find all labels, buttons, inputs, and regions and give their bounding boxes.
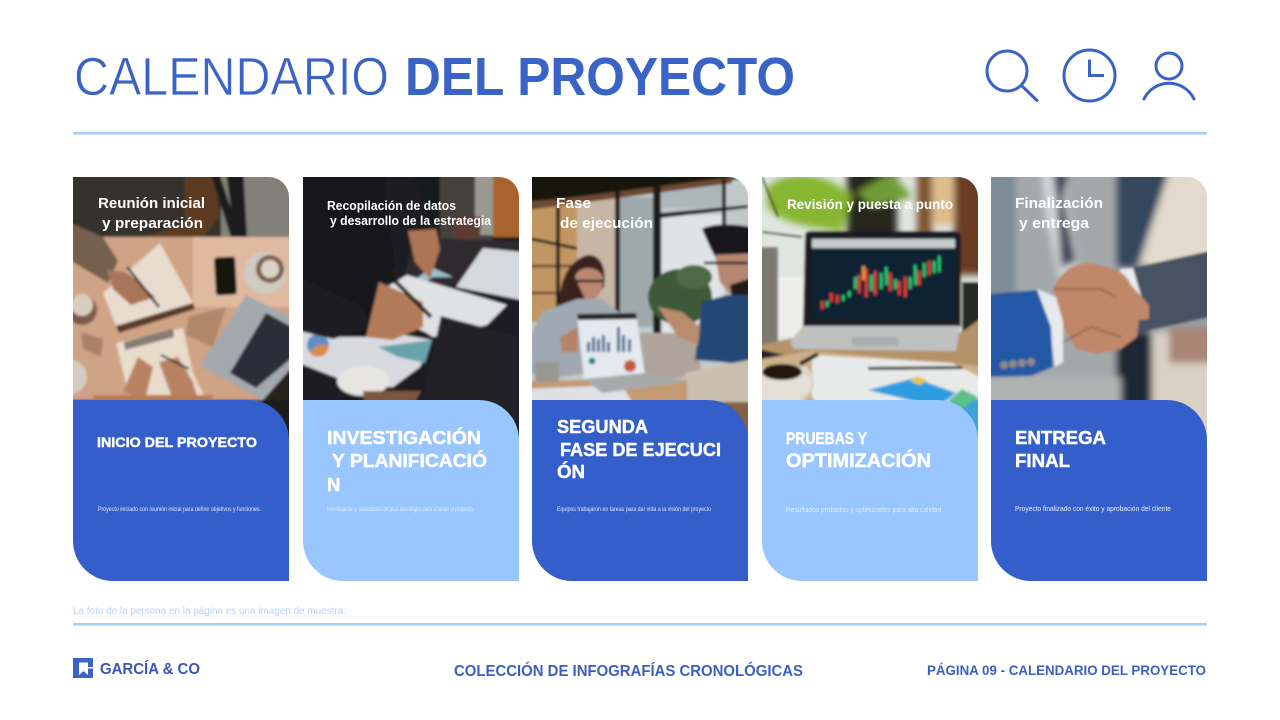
card heading	[786, 429, 931, 472]
logo: García & Co	[73, 658, 200, 678]
card heading: INVESTIGACIÓN	[327, 427, 481, 448]
icon: search	[987, 51, 1037, 100]
footer page label: PÁGINA 09 - CALENDARIO DEL PROYECTO	[927, 663, 1206, 678]
photo caption: de ejecución	[560, 216, 653, 232]
panel: blue description block	[73, 400, 289, 581]
panel: card 5 entrega final	[991, 177, 1207, 581]
panel: light blue description block	[762, 400, 978, 581]
card heading	[1015, 427, 1106, 471]
card heading: ÓN	[557, 461, 585, 482]
card heading	[327, 427, 487, 495]
card heading: PRUEBAS Y	[786, 429, 868, 448]
photo caption: Finalización	[1015, 196, 1103, 212]
photo caption: Reunión inicial	[98, 196, 205, 212]
photo caption: Recopilación de datos	[327, 199, 456, 213]
photo caption	[98, 196, 205, 232]
title: CALENDARIO	[74, 47, 389, 107]
icon: user	[1144, 53, 1194, 99]
panel: card 1 inicio del proyecto	[73, 177, 289, 581]
panel: light blue description block	[303, 400, 519, 581]
card description: Equipos trabajaron en tareas para dar vida a la visión del proyecto	[557, 507, 712, 513]
photo caption: y desarrollo de la estrategia	[330, 214, 492, 228]
card heading: SEGUNDA	[557, 416, 648, 437]
card description: Proyecto iniciado con reunión inicial para definir objetivos y funciones.	[98, 507, 261, 513]
card description: Resultados probados y optimizados para alta calidad	[786, 505, 941, 514]
photo caption	[1015, 196, 1103, 232]
panel: blue description block	[991, 400, 1207, 581]
card heading: FINAL	[1015, 450, 1070, 471]
panel: card 4 pruebas y optimización	[762, 177, 978, 581]
card description: Investigación y elaboración de plan estratégico para orientar el proyecto.	[327, 507, 474, 513]
card heading: ENTREGA	[1015, 427, 1106, 448]
title: DEL PROYECTO	[405, 47, 795, 107]
title	[74, 47, 795, 107]
sample image note: La foto de la persona en la página es una imagen de muestra.	[73, 606, 346, 617]
photo caption	[556, 196, 653, 232]
card heading: OPTIMIZACIÓN	[786, 450, 931, 472]
photo: desk from above	[73, 177, 289, 439]
photo: meeting at laptop	[532, 177, 748, 439]
panel: card 3 segunda fase de ejecución	[532, 177, 748, 581]
icon: logo mark	[73, 658, 93, 678]
panel: blue description block	[532, 400, 748, 581]
photo caption: y preparación	[102, 216, 203, 232]
panel: card 2 investigación y planificación	[303, 177, 519, 581]
card heading: N	[327, 474, 340, 495]
footer collection title: COLECCIÓN DE INFOGRAFÍAS CRONOLÓGICAS	[454, 662, 803, 680]
card heading: INICIO DEL PROYECTO	[97, 434, 257, 450]
card heading: FASE DE EJECUCI	[560, 439, 721, 460]
photo caption	[327, 199, 492, 228]
card description: Proyecto finalizado con éxito y aprobación del cliente	[1015, 504, 1171, 513]
card heading: Y PLANIFICACIÓ	[332, 450, 487, 471]
card heading	[557, 416, 721, 482]
photo caption: Revisión y puesta a punto	[787, 197, 953, 212]
photo: handshake	[991, 177, 1207, 439]
logo: García & Co: GARCÍA & CO	[100, 661, 200, 678]
photo caption: Fase	[556, 196, 591, 212]
photo: hands over documents	[303, 177, 519, 439]
photo caption: y entrega	[1019, 216, 1090, 232]
photo: laptop with candlestick chart	[762, 177, 978, 439]
icon: clock	[1064, 50, 1115, 101]
